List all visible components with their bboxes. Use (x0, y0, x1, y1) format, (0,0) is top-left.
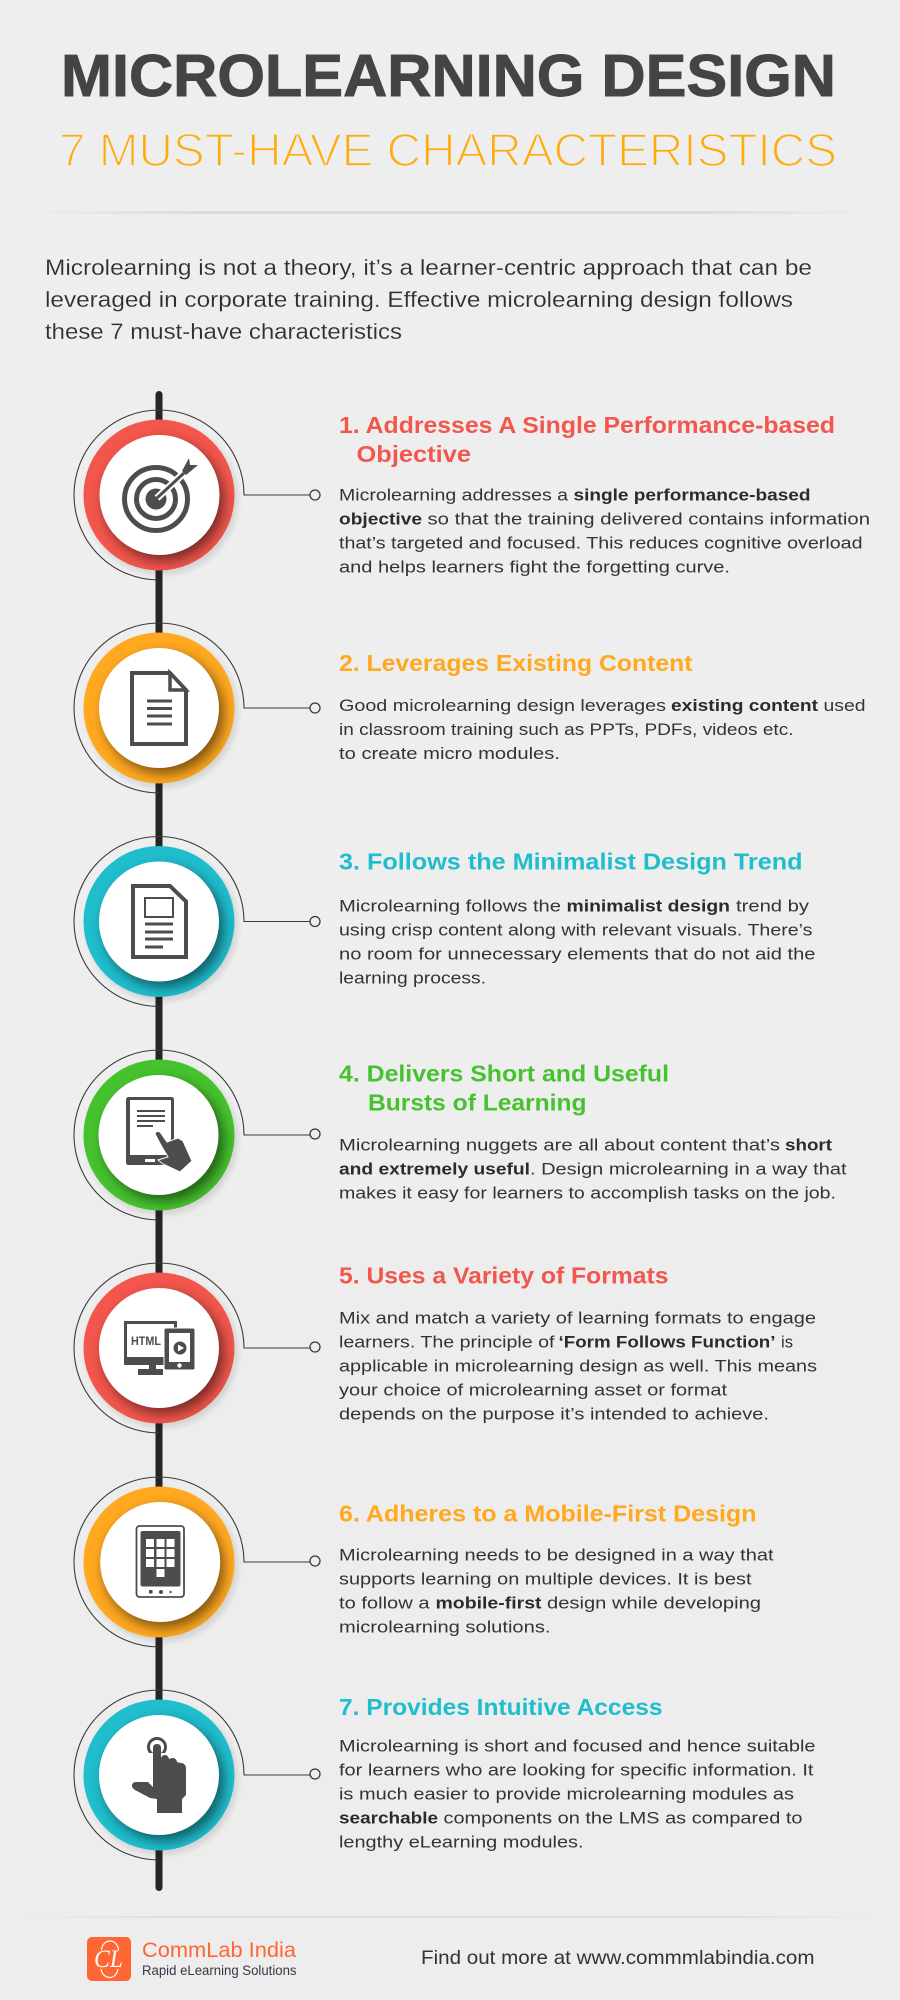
step 6 text: design while developing (547, 1594, 761, 1612)
step 6 text: 6. Adheres to a Mobile-First Design (339, 1500, 756, 1526)
step 6 text: supports learning on multiple devices. It is best (339, 1570, 752, 1588)
icon: mobile keypad (136, 1526, 184, 1597)
step 6 text: microlearning solutions. (339, 1618, 550, 1636)
step 6 text (339, 1500, 774, 1636)
step 1 text: so that the training delivered contains information (428, 510, 870, 528)
intro text (45, 255, 812, 344)
step 6 text: Microlearning needs to be designed in a way that (339, 1546, 774, 1564)
step 5 text: ‘Form Follows Function’ (558, 1332, 776, 1352)
icon: target with arrow (124, 458, 198, 530)
footer logo (87, 1937, 131, 1981)
icon: document with image (133, 886, 186, 957)
step 3 text: Microlearning follows the (339, 896, 561, 916)
step 4 text: Microlearning nuggets are all about content that’s (339, 1136, 780, 1154)
step 4 text: short (785, 1136, 832, 1154)
subtitle: 7 MUST-HAVE CHARACTERISTICS (59, 124, 837, 176)
step 2 text: to create micro modules. (339, 744, 560, 763)
step 1 text: 1. Addresses A Single Performance-based (339, 412, 835, 438)
step 4 text: . Design microlearning in a way that (530, 1160, 847, 1178)
footer logo: CL (94, 1946, 123, 1973)
step 7 text: searchable (339, 1808, 438, 1828)
intro text: leveraged in corporate training. Effective microlearning design follows (45, 287, 793, 312)
step 1 text (339, 412, 870, 576)
step 3 text (339, 848, 816, 988)
step 5 text: your choice of microlearning asset or format (339, 1380, 727, 1400)
footer brand name: Rapid eLearning Solutions (142, 1963, 297, 1978)
step 3 text: 3. Follows the Minimalist Design Trend (339, 848, 802, 874)
step 2 text: used (824, 696, 866, 715)
step 6 text: to follow a (339, 1594, 430, 1612)
footer brand name (142, 1939, 297, 1978)
timeline line (156, 391, 162, 1891)
step 3 text: minimalist design (566, 896, 730, 916)
step 1 text: that’s targeted and focused. This reduces cognitive overload (339, 534, 862, 552)
icon: HTML monitor and tablet (124, 1321, 195, 1375)
step 7 text: components on the LMS as compared to (444, 1808, 802, 1828)
step 2 text: existing content (671, 696, 818, 715)
step 4 icon badge (74, 1050, 320, 1220)
icon: HTML monitor and tablet: HTML (131, 1336, 161, 1348)
step 1 text: Microlearning addresses a (339, 486, 569, 504)
icon: tapping finger (132, 1738, 186, 1813)
title: MICROLEARNING DESIGN (61, 43, 836, 109)
step 7 text (339, 1694, 816, 1852)
intro text: these 7 must-have characteristics (45, 319, 402, 344)
footer link: Find out more at www.commmlabindia.com (421, 1947, 814, 1969)
step 5 text: Mix and match a variety of learning formats to engage (339, 1308, 816, 1328)
footer brand name: CommLab India (142, 1939, 296, 1962)
step 3 icon badge (74, 836, 320, 1006)
step 1 text: objective (339, 510, 422, 528)
step 5 icon badge (74, 1263, 320, 1433)
step 1 text: Objective (356, 441, 471, 467)
step 4 text: and extremely useful (339, 1160, 530, 1178)
step 7 text: is much easier to provide microlearning modules as (339, 1784, 794, 1804)
step 7 text: lengthy eLearning modules. (339, 1832, 584, 1852)
step 7 text: for learners who are looking for specific information. It (339, 1760, 814, 1780)
step 5 text: depends on the purpose it’s intended to achieve. (339, 1404, 769, 1424)
step 3 text: using crisp content along with relevant visuals. There’s (339, 920, 812, 940)
step 4 text: makes it easy for learners to accomplish tasks on the job. (339, 1184, 836, 1202)
step 5 text: is (781, 1332, 793, 1352)
step 7 icon badge (74, 1690, 320, 1860)
step 4 text: Bursts of Learning (368, 1090, 586, 1116)
step 4 text (339, 1060, 847, 1202)
step 2 text: Good microlearning design leverages (339, 696, 666, 715)
step 5 text: learners. The principle of (339, 1332, 555, 1352)
step 7 text: 7. Provides Intuitive Access (339, 1694, 662, 1720)
step 5 text: applicable in microlearning design as well. This means (339, 1356, 817, 1376)
step 3 text: learning process. (339, 968, 486, 988)
step 4 text: 4. Delivers Short and Useful (339, 1060, 669, 1086)
icon: document (132, 673, 186, 744)
step 5 text (339, 1262, 817, 1424)
icon: tablet with tapping hand (126, 1097, 192, 1172)
step 5 text: 5. Uses a Variety of Formats (339, 1262, 668, 1288)
step 2 text (339, 650, 866, 763)
step 6 icon badge (74, 1477, 320, 1647)
step 3 text: no room for unnecessary elements that do not aid the (339, 944, 816, 964)
step 2 text: in classroom training such as PPTs, PDFs, videos etc. (339, 720, 794, 739)
step 1 text: and helps learners fight the forgetting curve. (339, 558, 730, 576)
step 1 icon badge (74, 410, 320, 580)
step 3 text: trend by (736, 896, 810, 916)
step 6 text: mobile-first (436, 1594, 542, 1612)
intro text: Microlearning is not a theory, it’s a learner-centric approach that can be (45, 255, 812, 280)
step 1 text: single performance-based (574, 486, 810, 504)
step 2 text: 2. Leverages Existing Content (339, 650, 693, 676)
step 7 text: Microlearning is short and focused and hence suitable (339, 1736, 816, 1756)
step 2 icon badge (74, 623, 320, 793)
